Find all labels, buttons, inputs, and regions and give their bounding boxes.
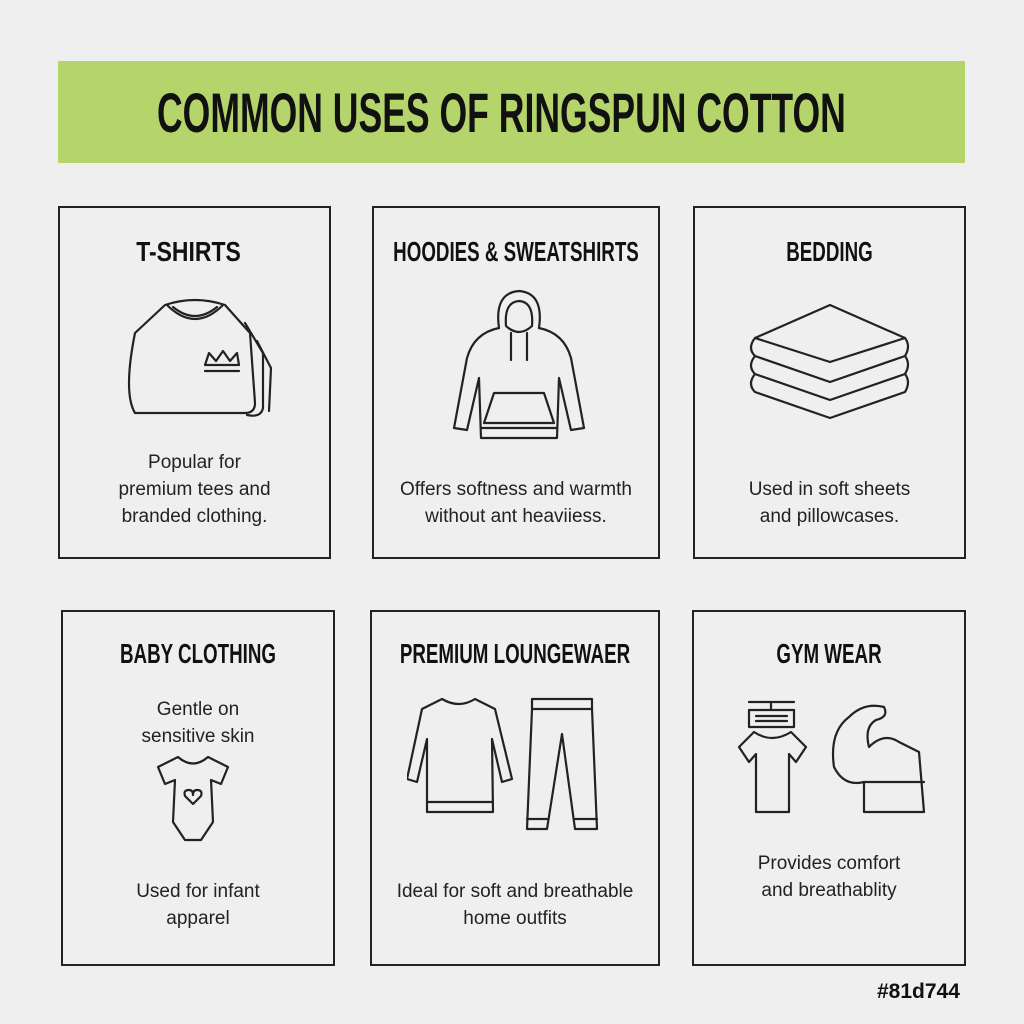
text: without ant heaviiess.: [425, 506, 607, 527]
text: premium tees and: [118, 479, 271, 500]
text: [397, 881, 633, 929]
heading: t-shirts: T-SHIRTS: [136, 236, 241, 267]
text: [118, 452, 271, 527]
title: [58, 61, 965, 163]
text: [749, 479, 910, 527]
heading: hoodies: HOODIES & SWEATSHIRTS: [393, 236, 639, 267]
text: top: Gentle on: [157, 699, 239, 720]
panel: gym wear: [692, 610, 966, 966]
text: and breathablity: [761, 880, 897, 901]
icon: gym wear: [738, 700, 926, 814]
panel: bedding: [693, 206, 966, 559]
text: [758, 853, 900, 901]
panel: hoodies: [372, 206, 660, 559]
text: Used in soft sheets: [749, 479, 910, 500]
heading: bedding: BEDDING: [786, 236, 873, 267]
text: and pillowcases.: [760, 506, 899, 527]
text: Provides comfort: [758, 853, 900, 874]
text: [400, 479, 632, 527]
text: bottom: apparel: [166, 908, 230, 929]
text: top: [142, 699, 254, 747]
icon: folded t-shirt: [128, 298, 272, 417]
color code label: #81d744: [877, 980, 960, 1003]
panel: t-shirts: [58, 206, 331, 559]
text: top: sensitive skin: [142, 726, 254, 747]
heading: gym wear: GYM WEAR: [776, 638, 882, 669]
text: Offers softness and warmth: [400, 479, 632, 500]
heading: loungewear: PREMIUM LOUNGEWAER: [400, 638, 630, 669]
text: Ideal for soft and breathable: [397, 881, 633, 902]
title: COMMON USES OF RINGSPUN COTTON: [157, 81, 846, 144]
text: Popular for: [148, 452, 241, 473]
icon: baby onesie: [156, 756, 230, 842]
text: home outfits: [463, 908, 567, 929]
icon: hoodie: [452, 290, 586, 440]
heading: baby clothing: BABY CLOTHING: [120, 638, 276, 669]
panel: baby clothing: [61, 610, 335, 966]
text: branded clothing.: [122, 506, 267, 527]
icon: stacked sheets: [750, 304, 910, 420]
panel: loungewear: [370, 610, 660, 966]
text: bottom: Used for infant: [136, 881, 260, 902]
text: bottom: [136, 881, 260, 929]
icon: loungewear set: [407, 698, 598, 830]
